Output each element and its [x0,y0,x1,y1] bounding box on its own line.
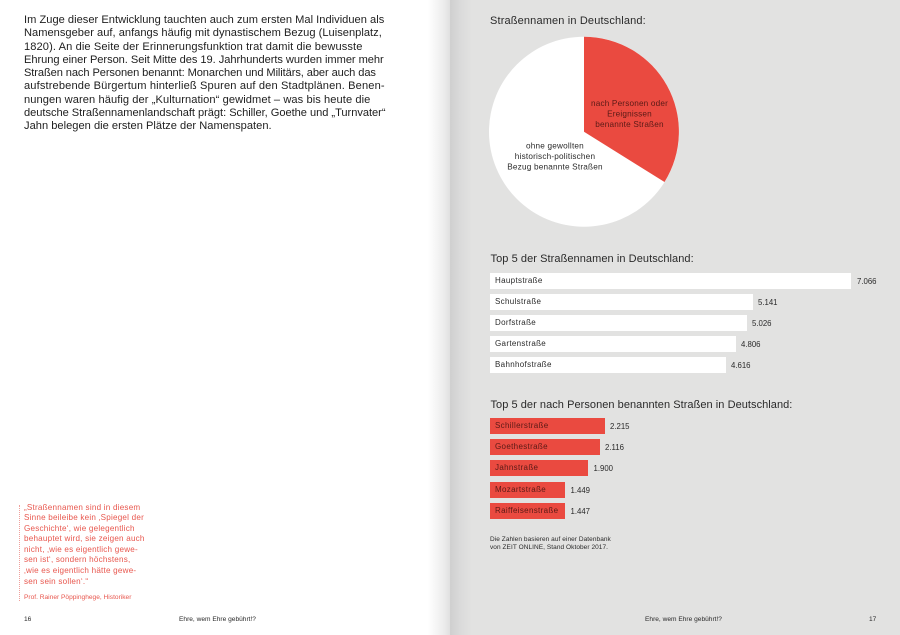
running title right: Ehre, wem Ehre gebührt!? [645,616,722,623]
callout: quote: „Straßennamen sind in diesem [24,502,140,512]
page number right: 17 [869,616,876,623]
text block: source note: von ZEIT ONLINE, Stand Oktober 2017. [490,544,608,551]
pie chart: nach Personen oder [591,99,668,108]
bar chart: top 5 streets named after persons: 1.447 [570,506,590,516]
panel: right page background [450,0,900,635]
text block: body paragraph: Im Zuge dieser Entwicklung tauchten auch zum ersten Mal Individuen als [24,14,384,26]
pie chart: Ereignissen [607,110,652,118]
bar chart: top 5 street names: 4.806 [741,340,761,349]
bar chart: top 5 street names: Schulstraße [495,297,541,306]
callout: quote: Prof. Rainer Pöppinghege, Historiker [24,594,131,601]
running title left: Ehre, wem Ehre gebührt!? [179,616,256,623]
callout: quote [19,505,150,601]
callout: quote: sen sein sollen‘.“ [24,577,88,586]
bar chart: top 5 streets named after persons: Jahnstraße [495,463,538,472]
bar chart: top 5 streets named after persons: Schillerstraße [495,421,549,430]
bar chart: top 5 street names: 5.141 [758,298,778,307]
text block: source note: Die Zahlen basieren auf einer Datenbank [490,536,611,542]
bar chart: top 5 streets named after persons: 2.116 [605,443,624,452]
bar chart: top 5 streets named after persons: Goethestraße [495,442,548,451]
heading: top 5 streets named after persons: Top 5 der nach Personen benannten Straßen in Deutschland: [490,399,792,411]
heading: pie chart: Straßennamen in Deutschland: [490,15,646,27]
callout: quote: Sinne beileibe kein ‚Spiegel der [24,513,144,522]
pie chart: ohne gewollten [526,142,584,150]
bar chart: top 5 streets named after persons: 1.449 [570,486,590,494]
text block: body paragraph: aufstrebende Bürgertum hinterließ Spuren auf den Stadtplänen. Benen- [24,80,385,92]
text block: body paragraph [24,14,386,132]
text block: body paragraph: Straßen nach Personen benannt: Monarchen und Militärs, aber auch das [24,67,376,79]
heading: top 5 street names: Top 5 der Straßennamen in Deutschland: [490,253,694,265]
page fold shadow on left page [428,0,450,635]
pie chart: Bezug benannte Straßen [507,162,603,172]
bar chart: top 5 streets named after persons: Raiffeisenstraße [495,506,558,514]
text block: body paragraph: 1820). An die Seite der Erinnerungsfunktion trat damit die bewusste [24,41,362,53]
callout: quote: Geschichte‘, wie gelegentlich [24,524,135,533]
callout: quote: ‚wie es eigentlich hätte gewe- [24,566,136,575]
bar chart: top 5 street names: Bahnhofstraße [495,360,552,369]
pie chart: benannte Straßen [595,120,664,129]
bar chart: top 5 street names: 4.616 [731,361,751,370]
bar chart: top 5 street names: 5.026 [752,319,772,328]
text block: body paragraph: nungen waren häufig der „Kulturnation“ gewidmet – was bis heute die [24,94,370,106]
bar chart: top 5 streets named after persons: 2.215 [610,422,630,431]
page number left: 16 [24,616,31,623]
text block: body paragraph: Ehrung einer Person. Seit Mitte des 19. Jahrhunderts wurden immer mehr [24,54,384,66]
bar chart: top 5 street names: Hauptstraße [495,276,543,284]
bar chart: top 5 street names: Dorfstraße [495,318,536,327]
pie chart: historisch-politischen [515,152,595,161]
text block: body paragraph: Namensgeber auf, anfangs häufig mit dynastischem Bezug (Luisenplatz, [24,27,382,39]
pie chart [489,36,679,227]
text block: source note [490,536,611,551]
callout: quote: sen ist‘, sondern höchstens, [24,555,130,564]
text block: body paragraph: Jahn belegen die ersten Plätze der Namenspaten. [24,120,272,132]
bar chart: top 5 street names: 7.066 [857,276,877,286]
text block: body paragraph: deutsche Straßennamenlandschaft prägt: Schiller, Goethe und „Turnvater“ [24,107,385,119]
bar chart: top 5 streets named after persons: Mozartstraße [495,484,546,494]
callout: quote: nicht, ‚wie es eigentlich gewe- [24,545,138,554]
bar chart: top 5 street names: Gartenstraße [495,339,546,348]
callout: quote: behauptet wird, sie zeigen auch [24,534,145,543]
bar chart: top 5 streets named after persons: 1.900 [594,464,613,473]
